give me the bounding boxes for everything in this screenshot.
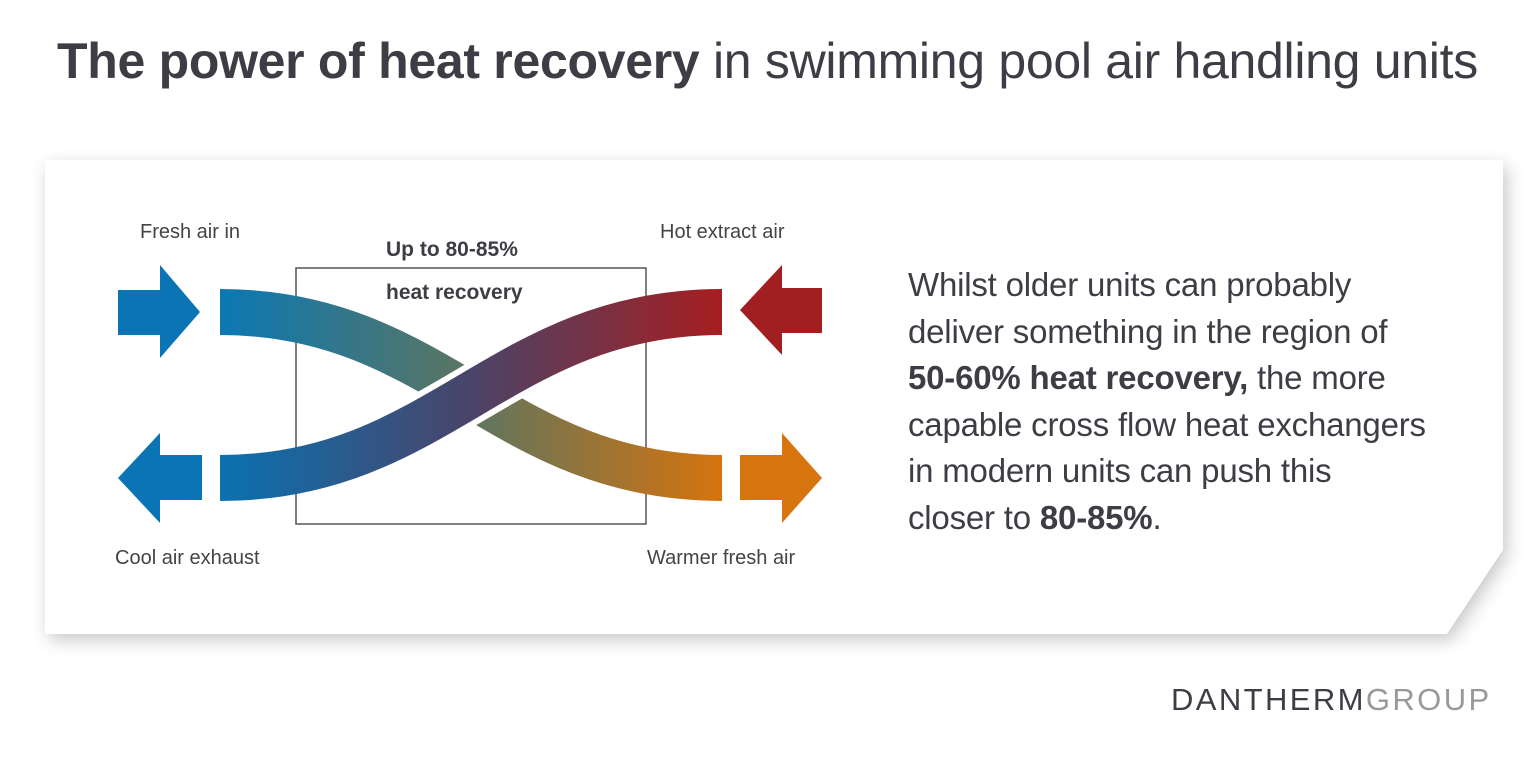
panel — [40, 157, 1516, 649]
arrow: warmer fresh air — [740, 433, 822, 523]
arrow: fresh air in — [118, 265, 200, 358]
label: heat recovery: Up to 80-85% — [386, 238, 518, 261]
heat exchanger box — [296, 268, 646, 524]
label: warmer fresh air: Warmer fresh air — [647, 547, 795, 569]
text block: Whilst older units can probably — [908, 266, 1351, 303]
label: fresh air in: Fresh air in — [140, 221, 240, 243]
label: heat recovery — [386, 238, 523, 304]
label: hot extract air: Hot extract air — [660, 221, 784, 243]
text block: capable cross flow heat exchangers — [908, 406, 1426, 442]
arrow: cool air exhaust — [118, 433, 202, 523]
arrow: hot extract air — [740, 265, 822, 355]
label: heat recovery: heat recovery — [386, 281, 523, 304]
title: The power of heat recovery in swimming pool air handling units — [57, 33, 1478, 89]
text block: 50-60% heat recovery, the more — [908, 359, 1386, 396]
text block — [908, 266, 1426, 536]
text block: deliver something in the region of — [908, 312, 1387, 350]
label: cool air exhaust: Cool air exhaust — [115, 547, 260, 569]
band: hot extract to cool exhaust — [220, 312, 722, 478]
band: fresh air to warmer fresh air — [220, 312, 722, 478]
text block: closer to 80-85%. — [908, 498, 1161, 536]
text block: in modern units can push this — [908, 452, 1331, 489]
logo: DANTHERMGROUP — [1171, 682, 1492, 717]
